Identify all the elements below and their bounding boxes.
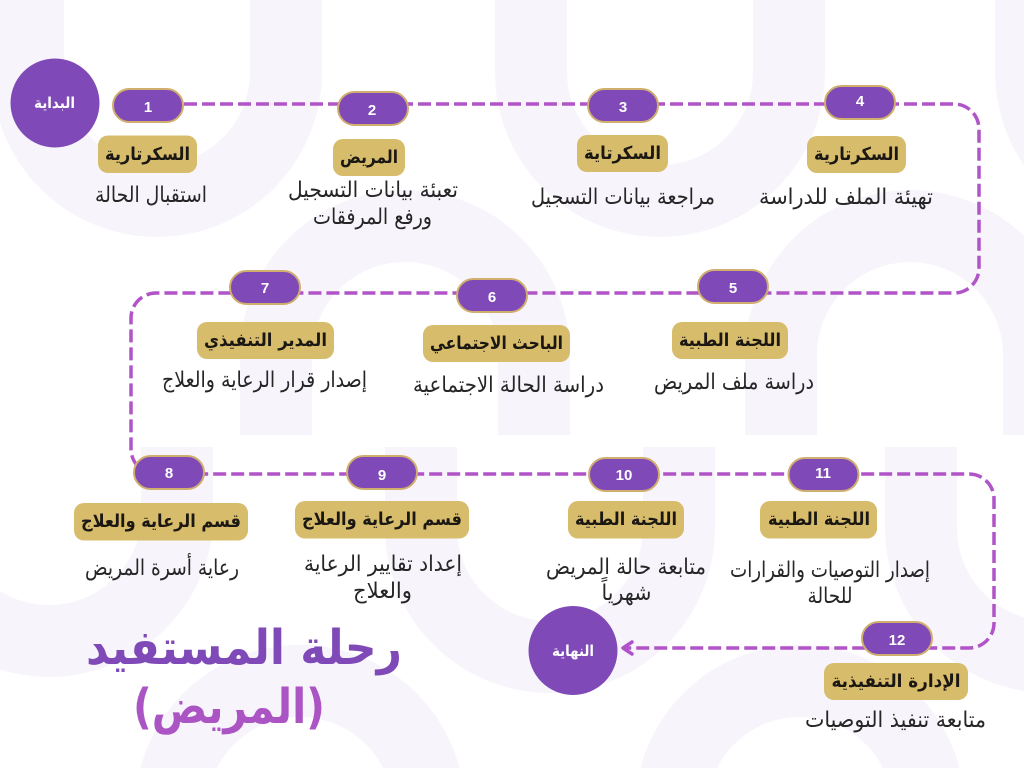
step 9: قسم الرعاية والعلاج bbox=[302, 509, 462, 530]
title bbox=[86, 620, 402, 735]
step 10: اللجنة الطبية bbox=[575, 509, 677, 530]
step 7 bbox=[162, 271, 367, 393]
step 6 bbox=[413, 279, 604, 398]
step 1: السكرتارية bbox=[105, 144, 190, 165]
step 5: اللجنة الطبية bbox=[679, 330, 781, 351]
step 11: إصدار التوصيات والقرارات bbox=[730, 558, 930, 583]
step 10: متابعة حالة المريض bbox=[546, 555, 706, 580]
step 10 bbox=[546, 458, 706, 606]
step 12: متابعة تنفيذ التوصيات bbox=[805, 708, 986, 733]
step 9: إعداد تقايير الرعاية bbox=[304, 552, 462, 577]
step 6: الباحث الاجتماعي bbox=[430, 333, 563, 354]
step 1 bbox=[95, 89, 207, 208]
step 8: رعاية أسرة المريض bbox=[85, 553, 239, 581]
step 4: 4 bbox=[856, 93, 865, 110]
step 4: تهيئة الملف للدراسة bbox=[759, 185, 933, 210]
step 9: 9 bbox=[378, 467, 386, 484]
step 10: 10 bbox=[616, 467, 632, 484]
step 9: والعلاج bbox=[353, 579, 412, 604]
step 3: السكرتاية bbox=[584, 143, 661, 164]
journey path: dashed connector bbox=[131, 104, 994, 654]
step 9 bbox=[295, 456, 469, 604]
step 11: 11 bbox=[815, 465, 831, 482]
step 12: 12 bbox=[889, 632, 905, 649]
step 3 bbox=[531, 89, 715, 210]
end circle: النهاية bbox=[552, 642, 594, 660]
step 2 bbox=[288, 92, 458, 230]
start circle bbox=[10, 58, 100, 148]
step 8: قسم الرعاية والعلاج bbox=[81, 511, 241, 532]
step 6: دراسة الحالة الاجتماعية bbox=[413, 373, 604, 398]
step 2: ورفع المرفقات bbox=[313, 205, 432, 230]
step 12: الإدارة التنفيذية bbox=[832, 671, 960, 692]
end circle bbox=[528, 606, 618, 695]
step 3: مراجعة بيانات التسجيل bbox=[531, 185, 715, 210]
step 8: 8 bbox=[165, 465, 173, 482]
step 6: 6 bbox=[488, 289, 496, 306]
step 10: شهرياً bbox=[601, 576, 652, 606]
step 2: تعبئة بيانات التسجيل bbox=[288, 178, 458, 203]
title: رحلة المستفيد bbox=[86, 620, 402, 676]
step 11 bbox=[730, 458, 930, 609]
step 1: 1 bbox=[144, 99, 152, 116]
title: (المريض) bbox=[133, 679, 325, 735]
start circle: البداية bbox=[34, 94, 75, 112]
step 2: 2 bbox=[368, 102, 376, 119]
step 11: للحالة bbox=[808, 584, 852, 609]
step 7: 7 bbox=[261, 280, 269, 297]
step 3: 3 bbox=[619, 99, 627, 116]
step 2: المريض bbox=[340, 147, 398, 168]
step 7: المدير التنفيذي bbox=[204, 330, 327, 351]
step 4 bbox=[759, 86, 933, 210]
step 4: السكرتارية bbox=[814, 144, 899, 165]
step 11: اللجنة الطبية bbox=[768, 509, 870, 530]
step 1: استقبال الحالة bbox=[95, 183, 207, 208]
step 5 bbox=[654, 270, 814, 395]
step 8 bbox=[74, 456, 248, 581]
step 5: 5 bbox=[729, 280, 737, 297]
step 5: دراسة ملف المريض bbox=[654, 370, 814, 395]
step 7: إصدار قرار الرعاية والعلاج bbox=[162, 368, 367, 393]
step 12 bbox=[805, 622, 986, 733]
